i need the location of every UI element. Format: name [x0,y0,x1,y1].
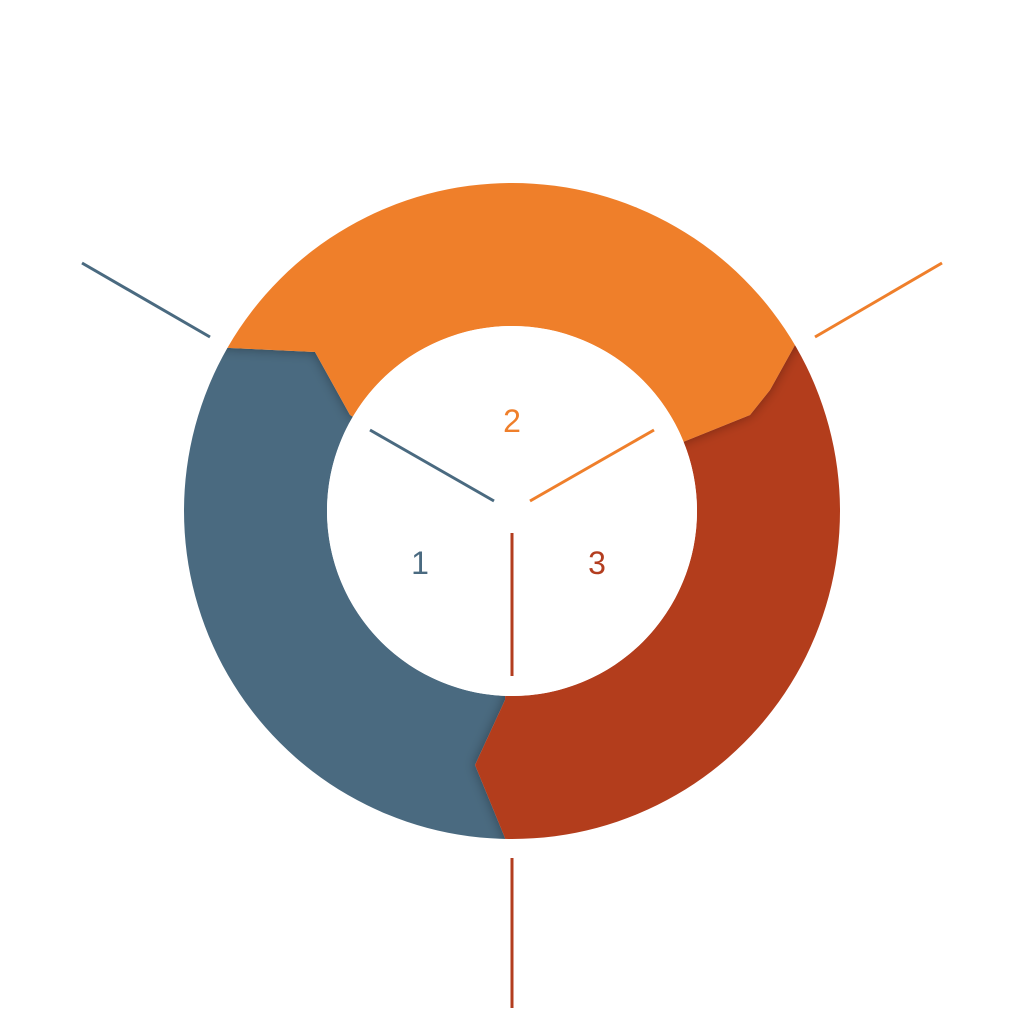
segment 3: red [472,345,840,839]
donut chart [184,183,840,839]
pointer line 1 outer [82,263,210,337]
pointer line 2 inner [530,430,654,501]
pointer line 3 inner [510,533,514,676]
segment 2: orange [225,183,800,448]
pointer line 1 inner [370,430,494,501]
label 1: 1 [411,545,429,581]
label 3: 3 [588,545,606,581]
pointer line 2 outer [815,263,942,337]
label 2: 2 [503,403,521,439]
pointer line 3 outer [510,858,514,1008]
segment 1: blue [184,348,506,839]
inner white circle [327,326,697,696]
